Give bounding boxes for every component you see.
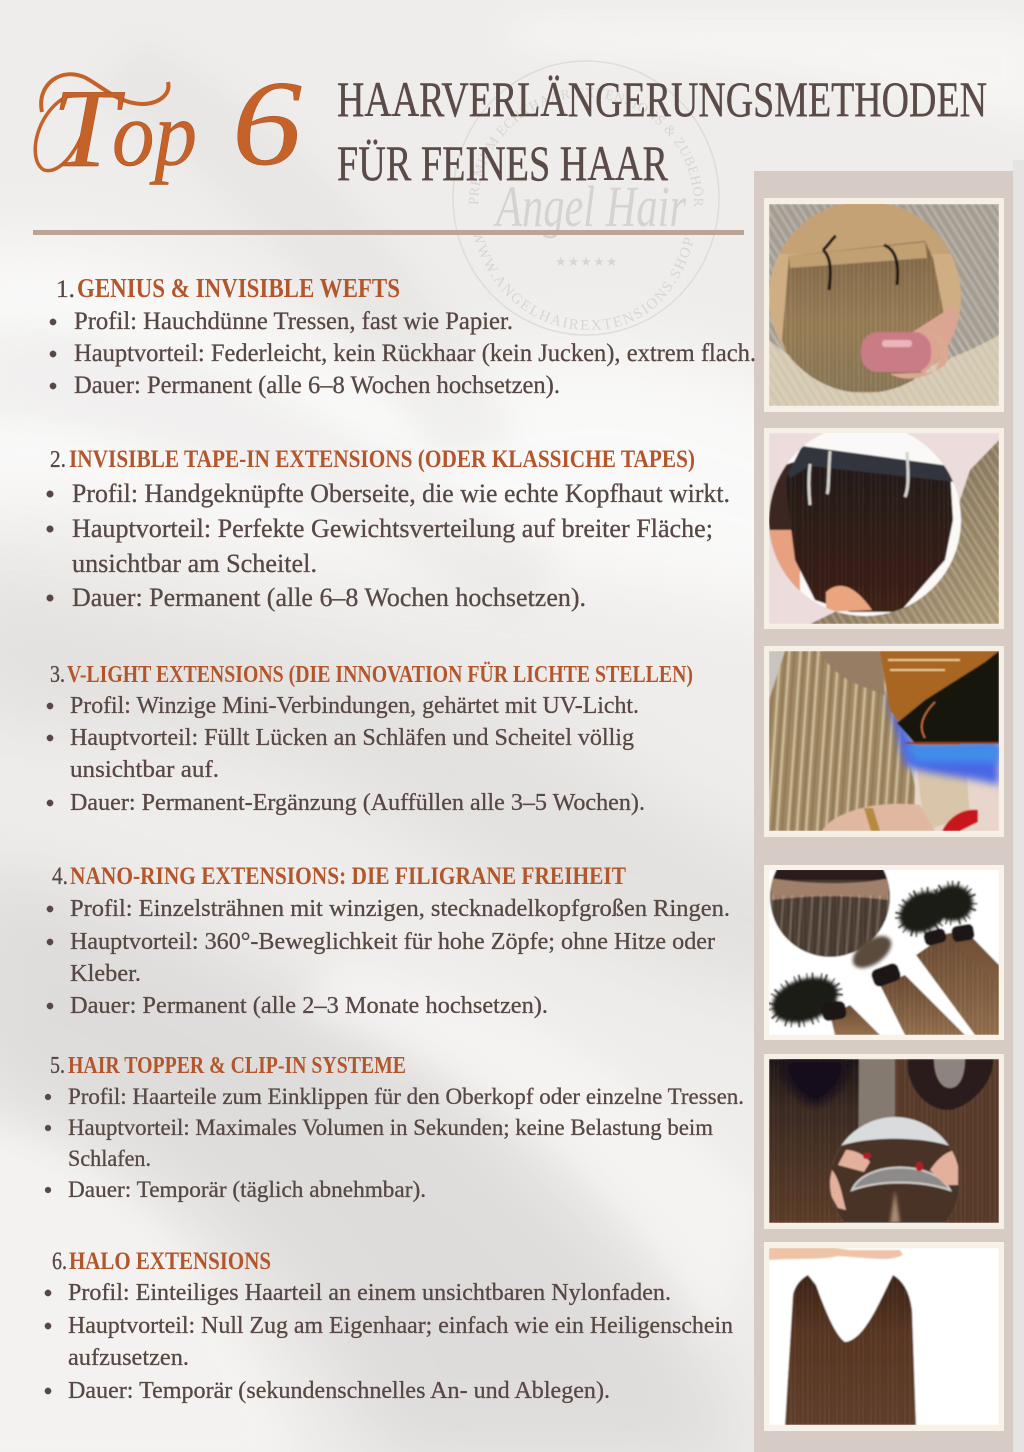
section 4: Nano-Ring Extensions [47, 863, 730, 1019]
section 1: Genius and Invisible Wefts [50, 273, 756, 399]
heading 5: 5. [50, 1053, 65, 1079]
title: Top 6 [35, 56, 302, 191]
list 4: Profil: Einzelsträhnen mit winzigen, stecknadelkopfgroßen Ringen. [70, 895, 730, 922]
title: Top 6: op [112, 83, 197, 185]
list 1: Profil: Hauchdünne Tressen, fast wie Papier. [74, 308, 513, 335]
title: main heading: FÜR FEINES HAAR [337, 135, 668, 191]
heading 2: INVISIBLE TAPE-IN EXTENSIONS (ODER KLASSICHE TAPES) [69, 446, 695, 473]
heading 3: 3. [50, 662, 65, 688]
list 1: Dauer: Permanent (alle 6–8 Wochen hochsetzen). [74, 372, 560, 399]
photo 5: hair topper [764, 1054, 1004, 1247]
list 2: Hauptvorteil: Perfekte Gewichtsverteilung auf breiter Fläche; [72, 514, 713, 543]
watermark: Angel Hair seal [452, 60, 720, 336]
list 1 [50, 308, 756, 399]
list 1: Hauptvorteil: Federleicht, kein Rückhaar (kein Jucken), extrem flach. [74, 340, 756, 367]
heading 6: 6. [52, 1248, 67, 1275]
list 2: Dauer: Permanent (alle 6–8 Wochen hochsetzen). [72, 583, 586, 612]
heading 3: V-LIGHT EXTENSIONS (DIE INNOVATION FÜR LICHTE STELLEN) [67, 662, 693, 688]
list 5: Dauer: Temporär (täglich abnehmbar). [68, 1177, 426, 1202]
section 2: Invisible Tape-In Extensions [47, 446, 730, 612]
list 4: Kleber. [70, 960, 141, 987]
title: main heading [337, 71, 987, 191]
photo 1: invisible weft with pink nail [764, 198, 1004, 412]
photo 6: halo extensions [764, 1242, 1004, 1431]
section 5: Hair Topper and Clip-In Systeme [45, 1053, 744, 1202]
list 6: Profil: Einteiliges Haarteil an einem unsichtbaren Nylonfaden. [68, 1279, 671, 1306]
list 5: Profil: Haarteile zum Einklippen für den Oberkopf oder einzelne Tressen. [68, 1084, 744, 1109]
heading 6: HALO EXTENSIONS [69, 1248, 271, 1275]
list 3: Dauer: Permanent-Ergänzung (Auffüllen alle 3–5 Wochen). [70, 789, 645, 816]
photo 4: nano-ring extensions [764, 865, 1004, 1040]
divider rule [33, 230, 744, 235]
list 6 [45, 1279, 733, 1404]
panel: image rail [754, 171, 1013, 1452]
title: Top 6: 6 [232, 56, 302, 191]
list 3: Hauptvorteil: Füllt Lücken an Schläfen und Scheitel völlig [70, 724, 634, 751]
photo 2: tape-in extensions [764, 424, 1004, 629]
list 4: Hauptvorteil: 360°-Beweglichkeit für hohe Zöpfe; ohne Hitze oder [70, 928, 715, 955]
list 3: Profil: Winzige Mini-Verbindungen, gehärtet mit UV-Licht. [70, 692, 639, 719]
watermark: Angel Hair seal: WWW.ANGELHAIREXTENSIONS.SHOP [473, 229, 693, 330]
heading 1: GENIUS & INVISIBLE WEFTS [77, 273, 400, 303]
heading 4: 4. [52, 863, 68, 890]
title: Top 6: T [52, 67, 125, 191]
list 6: Hauptvorteil: Null Zug am Eigenhaar; einfach wie ein Heiligenschein [68, 1312, 733, 1339]
section 3: V-Light Extensions [47, 662, 693, 816]
list 5: Schlafen. [68, 1146, 151, 1171]
list 5 [45, 1084, 744, 1202]
section 6: Halo Extensions [45, 1248, 733, 1404]
list 6: aufzusetzen. [68, 1344, 189, 1371]
heading 4: NANO-RING EXTENSIONS: DIE FILIGRANE FREIHEIT [70, 863, 626, 890]
list 4 [47, 895, 730, 1019]
photo 3: V-Light UV lamp [764, 646, 1004, 837]
watermark: Angel Hair seal: Angel Hair [493, 174, 686, 239]
list 6: Dauer: Temporär (sekundenschnelles An- und Ablegen). [68, 1377, 610, 1404]
list 2: Profil: Handgeknüpfte Oberseite, die wie echte Kopfhaut wirkt. [72, 479, 730, 508]
list 3: unsichtbar auf. [70, 756, 219, 783]
heading 2: 2. [50, 447, 66, 473]
list 5: Hauptvorteil: Maximales Volumen in Sekunden; keine Belastung beim [68, 1115, 713, 1140]
heading 1: 1. [56, 276, 75, 303]
list 2 [47, 479, 730, 612]
watermark: Angel Hair seal: PREMIUM ECHTHAAR EXTENSIONS & ZUBEHÖR [468, 88, 704, 207]
list 2: unsichtbar am Scheitel. [72, 549, 317, 578]
heading 5: HAIR TOPPER & CLIP-IN SYSTEME [68, 1053, 406, 1079]
list 4: Dauer: Permanent (alle 2–3 Monate hochsetzen). [70, 992, 548, 1019]
watermark: Angel Hair seal: ★★★★★ [555, 255, 618, 270]
list 3 [47, 692, 645, 816]
